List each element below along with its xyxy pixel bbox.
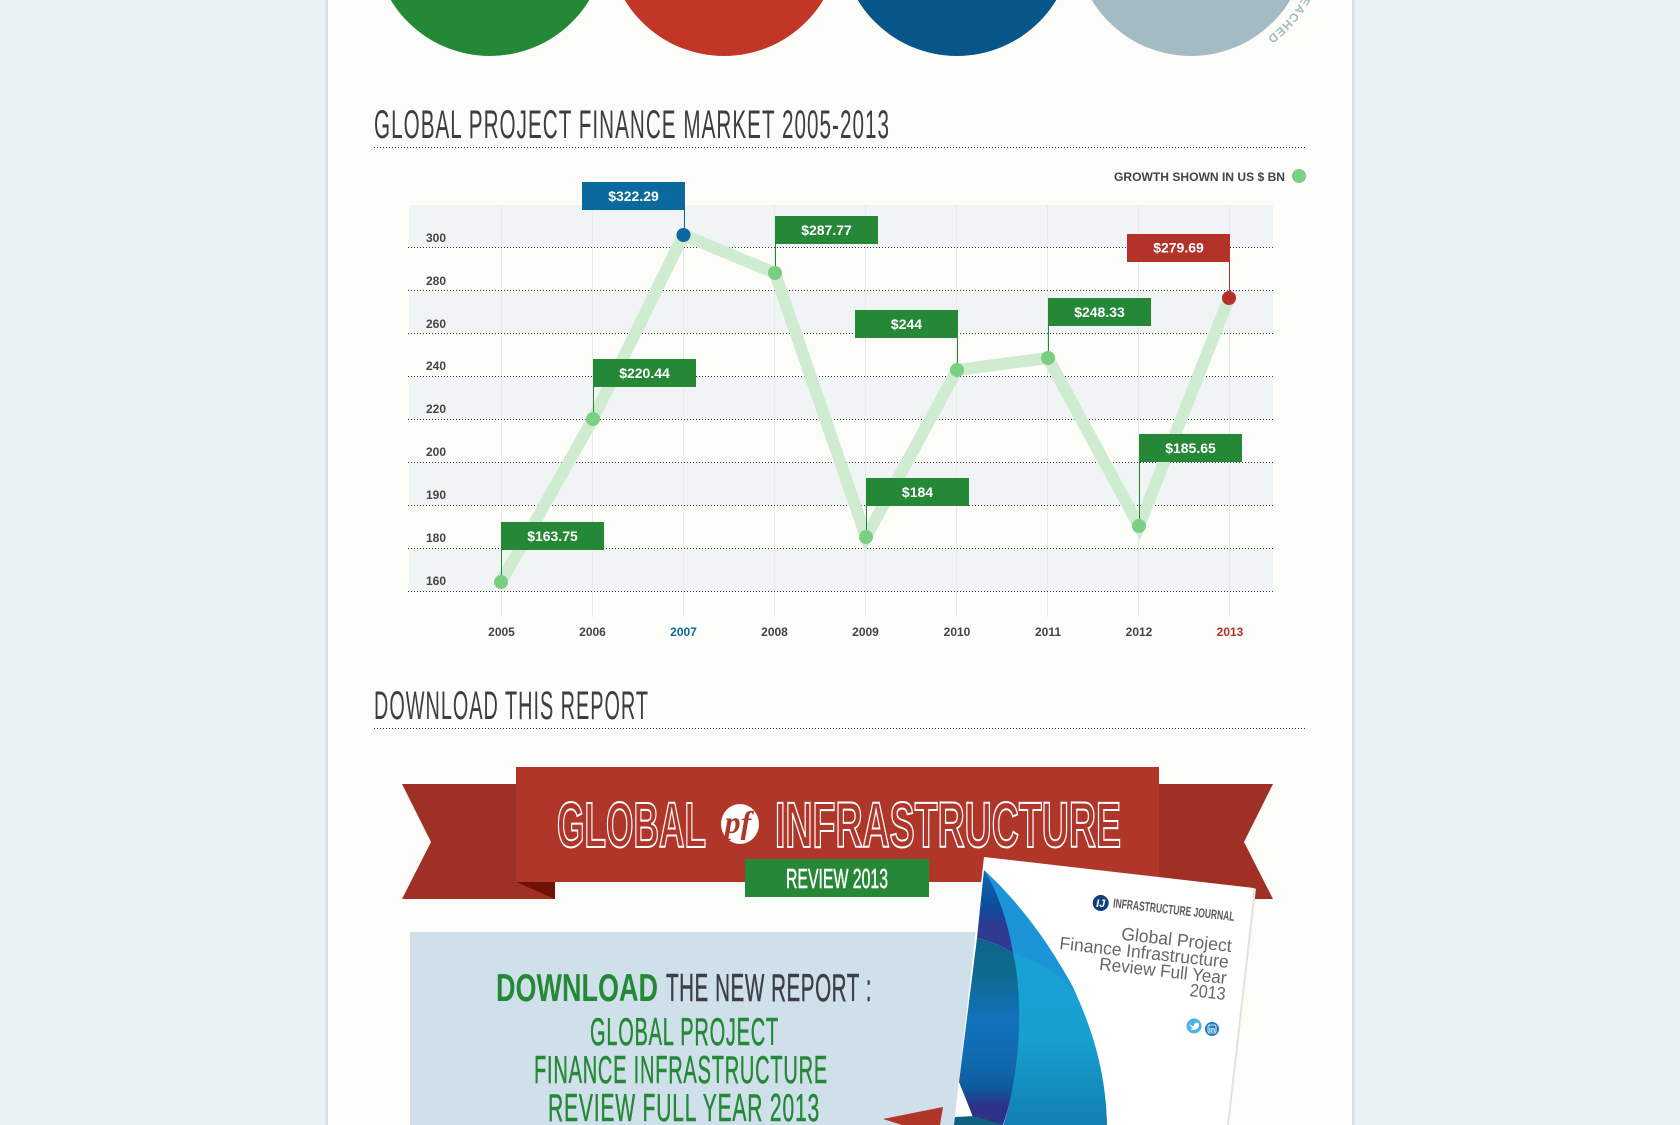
- report title: [534, 1011, 828, 1125]
- y axis labels: 180: [426, 531, 446, 545]
- y axis labels: 160: [426, 574, 446, 588]
- y axis labels: 280: [426, 274, 446, 288]
- badge: review 2013: [745, 859, 929, 897]
- data point 2008: $287.77: [801, 222, 852, 238]
- circle: grey: [1075, 0, 1307, 56]
- heading: global project finance market: GLOBAL PROJECT FINANCE MARKET 2005-2013: [374, 103, 890, 147]
- cover title: 2013: [1189, 980, 1227, 1004]
- y axis labels: [426, 231, 446, 588]
- report title: GLOBAL PROJECT: [590, 1011, 779, 1054]
- y axis labels: 300: [426, 231, 446, 245]
- data point 2005: [494, 522, 604, 589]
- chart bands: [409, 205, 1273, 592]
- icon: linkedin: in: [1209, 1027, 1215, 1034]
- y axis labels: 260: [426, 317, 446, 331]
- y axis labels: 240: [426, 359, 446, 373]
- icon: pf badge: [721, 804, 759, 844]
- data point 2009: [859, 478, 969, 544]
- icon: linkedin: [1205, 1022, 1219, 1036]
- data point 2006: $220.44: [619, 365, 670, 381]
- download call to action: DOWNLOAD: [496, 967, 658, 1010]
- icon: pf badge: pf: [722, 804, 755, 840]
- data point 2011: [1041, 298, 1151, 365]
- x axis labels: 2006: [579, 625, 606, 639]
- ribbon fold: [516, 882, 555, 899]
- badge: review 2013: REVIEW 2013: [786, 863, 888, 894]
- content panel: [324, 0, 1356, 1125]
- line chart: [408, 182, 1273, 639]
- chart legend: GROWTH SHOWN IN US $ BN: [1114, 170, 1285, 184]
- y axis labels: 190: [426, 488, 446, 502]
- cover title: Global Project: [1120, 924, 1233, 956]
- circle: blue: [841, 0, 1073, 56]
- banner word: global: GLOBAL: [557, 789, 706, 861]
- data point 2010: [855, 310, 964, 377]
- banner word: infrastructure: INFRASTRUCTURE: [775, 789, 1121, 861]
- circle: green: [374, 0, 606, 56]
- y axis labels: 200: [426, 445, 446, 459]
- report title: FINANCE INFRASTRUCTURE: [534, 1049, 828, 1092]
- icon: twitter: [1186, 1018, 1202, 1034]
- data point 2005: $163.75: [527, 528, 578, 544]
- cover title: [1059, 924, 1233, 1004]
- data point 2010: $244: [891, 316, 922, 332]
- circle: red: [608, 0, 840, 56]
- data point 2007: [582, 182, 690, 242]
- x axis labels: 2013: [1217, 625, 1244, 639]
- data point 2009: $184: [902, 484, 933, 500]
- icon: journal logo: [1093, 895, 1109, 911]
- x axis labels: 2010: [944, 625, 971, 639]
- ribbon banner: [402, 767, 1273, 899]
- data point 2012: $185.65: [1165, 440, 1216, 456]
- report cover: [953, 857, 1256, 1125]
- download call to action: [496, 967, 872, 1010]
- ribbon main band: [516, 767, 1159, 882]
- x axis labels: [488, 625, 1244, 639]
- data point 2008: [768, 216, 878, 280]
- cover title: Review Full Year: [1098, 954, 1228, 988]
- download call to action: THE NEW REPORT :: [666, 967, 872, 1010]
- red arrow: [883, 1107, 943, 1125]
- cover sail artwork: [953, 870, 1107, 1125]
- data point 2013: $279.69: [1153, 240, 1204, 256]
- data point 2007: $322.29: [608, 188, 659, 204]
- x axis labels: 2011: [1035, 625, 1061, 639]
- x axis labels: 2007: [670, 625, 697, 639]
- data point 2013: [1127, 234, 1236, 305]
- data point 2006: [586, 359, 696, 426]
- text: DOWNLOAD THIS REPORT: [374, 684, 649, 728]
- icon: journal logo: IJ: [1096, 898, 1106, 910]
- cover title: Finance Infrastructure: [1059, 933, 1230, 972]
- growth line: [501, 235, 1229, 582]
- row of cropped stat circles: [390, 0, 1310, 56]
- download panel: [410, 932, 1010, 1125]
- y axis labels: 220: [426, 402, 446, 416]
- x axis labels: 2012: [1126, 625, 1153, 639]
- ribbon left tail: [402, 784, 555, 899]
- data point 2011: $248.33: [1074, 304, 1125, 320]
- x axis labels: 2009: [852, 625, 879, 639]
- x axis labels: 2005: [488, 625, 515, 639]
- ribbon right tail: [1159, 784, 1273, 899]
- cover publisher name: INFRASTRUCTURE JOURNAL: [1112, 895, 1235, 924]
- data point 2012: [1132, 434, 1242, 533]
- x axis labels: 2008: [761, 625, 788, 639]
